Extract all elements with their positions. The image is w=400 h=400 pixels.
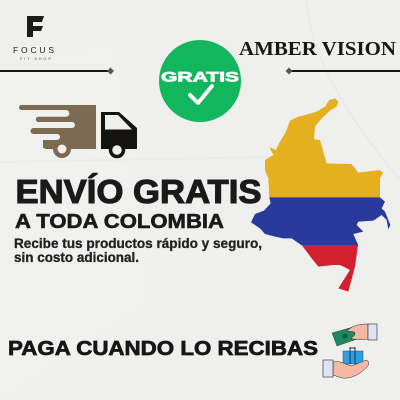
yellow band [265,98,383,198]
truck rear wheel [53,140,71,158]
logo tagline: FIT SHOP [20,56,51,61]
banknote [332,327,357,346]
call to action: pay on delivery: PAGA CUANDO LO RECIBAS [8,338,318,360]
subheading: a toda Colombia: A TODA COLOMBIA [15,210,224,233]
red band [302,245,358,292]
bottom hand [333,360,369,378]
description text [14,236,262,265]
blue band [251,197,390,245]
gift box [343,351,363,364]
brand title: AMBER VISION [239,38,397,60]
divider right with diamond [286,68,400,74]
brand logo: Focus Fit Shop [13,16,54,61]
truck cargo with speed lines [19,105,96,149]
top hand [347,324,368,340]
truck cab [101,112,137,149]
truck window [105,115,132,130]
bottom cuff [323,360,333,377]
badge: gratis [159,40,241,122]
heading: envío gratis: ENVÍO GRATIS [16,173,262,210]
top cuff [368,324,377,340]
badge check mark [190,86,212,103]
logo name: FOCUS [13,45,54,55]
logo letter F [27,16,44,37]
map of Colombia flag [251,98,390,292]
icon: delivery truck [19,105,137,158]
badge circle [159,40,241,122]
badge text: GRATIS [161,68,239,84]
icon: cash and gift exchange hands [323,324,377,378]
description text: Recibe tus productos rápido y seguro, [14,236,262,251]
divider left with diamond [0,68,114,74]
description text: sin costo adicional. [14,250,139,265]
truck front wheel [110,144,124,156]
